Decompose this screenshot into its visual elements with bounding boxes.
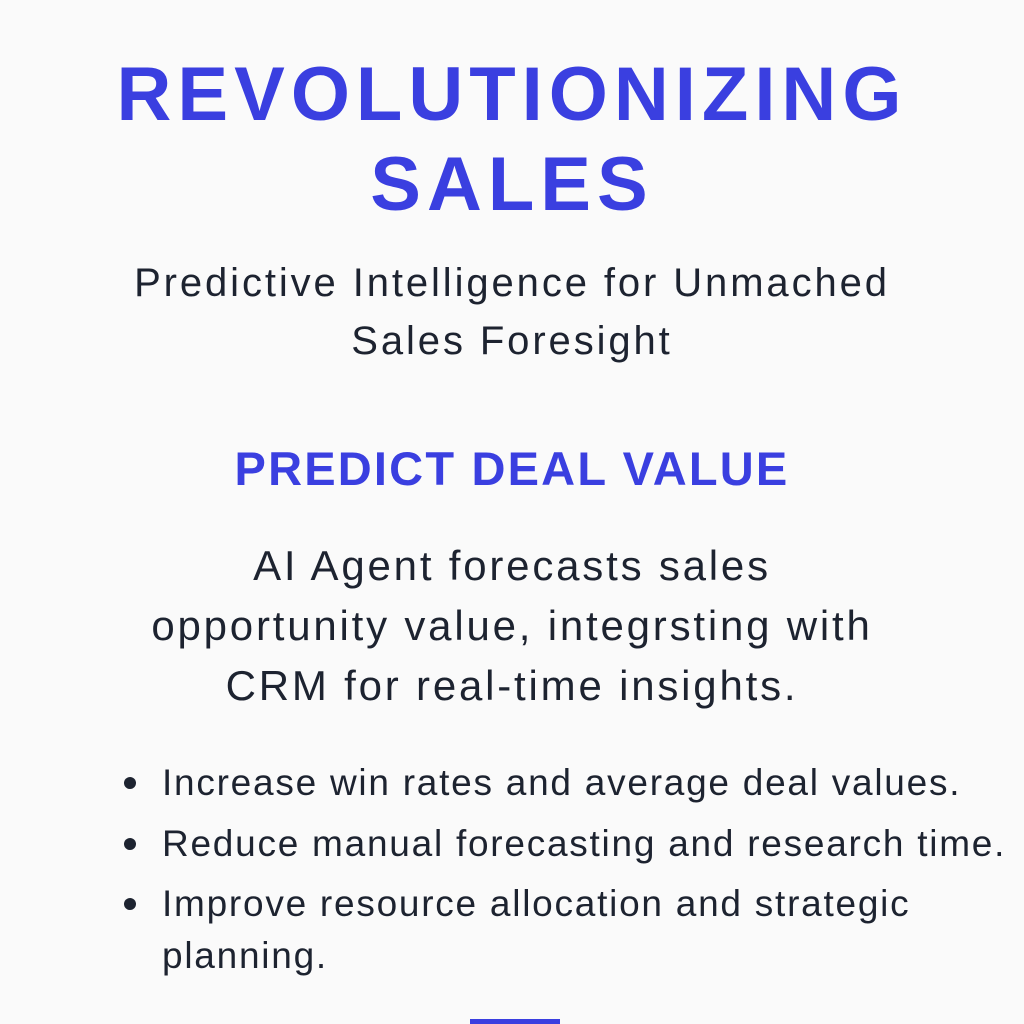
description text: CRM for real-time insights.	[226, 662, 798, 709]
description text	[151, 542, 873, 709]
bullet 3: planning.	[162, 935, 328, 976]
title: REVOLUTIONIZING	[117, 52, 907, 137]
bullet list	[124, 762, 1006, 976]
bottom accent bar	[470, 1019, 560, 1024]
description text: opportunity value, integrsting with	[151, 602, 873, 649]
section heading: PREDICT DEAL VALUE	[235, 442, 789, 495]
description text: AI Agent forecasts sales	[253, 542, 771, 589]
subtitle: Predictive Intelligence for Unmached	[134, 261, 890, 305]
title	[117, 52, 907, 227]
subtitle: Sales Foresight	[351, 319, 673, 363]
bullet 1: Increase win rates and average deal values.	[162, 762, 961, 803]
title: SALES	[370, 142, 654, 227]
subtitle	[134, 261, 890, 363]
bullet 2: Reduce manual forecasting and research time.	[162, 823, 1006, 864]
bullet 3: Improve resource allocation and strategic	[162, 883, 910, 924]
bullet 3	[124, 883, 910, 976]
